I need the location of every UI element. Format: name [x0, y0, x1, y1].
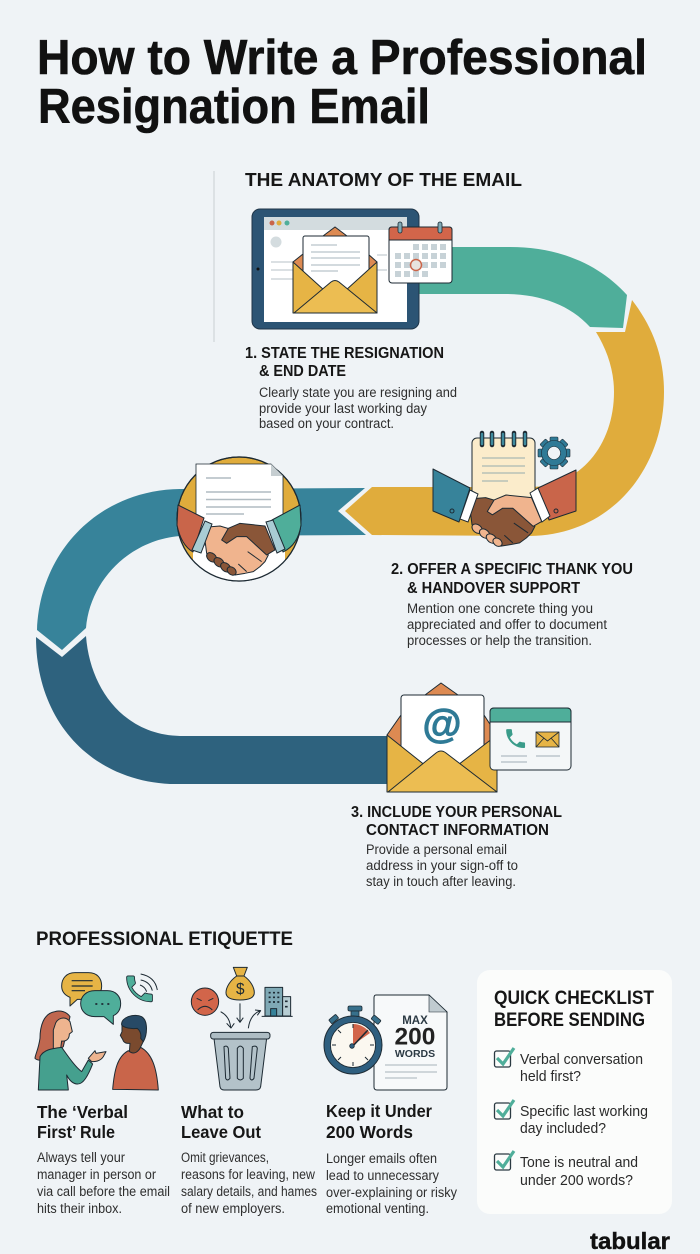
checklist item 1: held first? [520, 1068, 581, 1085]
trash bin [211, 1032, 270, 1090]
icon: stopwatch and 200 word document [324, 995, 447, 1090]
title: Resignation Email [38, 80, 430, 134]
etiquette 3 text: lead to unnecessary [326, 1168, 439, 1183]
checklist item 2 [494, 1100, 648, 1137]
etiquette 2 text: of new employers. [181, 1201, 285, 1216]
etiquette 1 text: Always tell your [37, 1150, 125, 1165]
arrow: teal band [415, 247, 627, 328]
heading: the anatomy of the email: THE ANATOMY OF THE EMAIL [245, 169, 522, 190]
checklist heading [494, 988, 654, 1031]
etiquette 2 text: What to [181, 1102, 244, 1122]
yellow speech bubble [62, 973, 102, 1006]
calendar [389, 222, 452, 283]
step 1 text: & END DATE [259, 363, 346, 380]
notepad [472, 433, 535, 513]
money bag: $ [236, 981, 245, 998]
contact card [490, 708, 571, 770]
envelope [387, 683, 497, 792]
stopwatch [324, 1006, 382, 1074]
etiquette 3 text: 200 Words [326, 1122, 413, 1142]
logo: tabular: tabular [590, 1228, 670, 1254]
icon: circle handshake with document [177, 457, 301, 581]
document: 200 [395, 1024, 435, 1050]
step 1 text: based on your contract. [259, 416, 394, 431]
step 3 text: address in your sign-off to [366, 858, 518, 873]
checklist item 2: Specific last working [520, 1103, 648, 1120]
checklist item 3 [494, 1151, 638, 1189]
phone [127, 974, 157, 1002]
etiquette 2 text: reasons for leaving, new [181, 1167, 315, 1182]
arrows [221, 1003, 261, 1028]
checklist heading: BEFORE SENDING [494, 1010, 645, 1031]
man [113, 1015, 158, 1090]
checklist item 2: day included? [520, 1120, 606, 1137]
etiquette 1 text: hits their inbox. [37, 1201, 122, 1216]
arrow: gold band [345, 300, 664, 536]
panel: quick checklist [477, 970, 672, 1214]
etiquette 2 text: Omit grievances, [181, 1150, 269, 1165]
etiquette 1 text: via call before the email [37, 1184, 170, 1199]
icon: trash bin with things to leave out [191, 967, 293, 1090]
step 3 text [351, 804, 562, 889]
etiquette 1 text [37, 1102, 170, 1216]
step 2 text: & HANDOVER SUPPORT [407, 580, 580, 597]
checklist item 3: Tone is neutral and [520, 1154, 638, 1171]
step 1 text: provide your last working day [259, 401, 427, 416]
step 1 text: Clearly state you are resigning and [259, 385, 457, 400]
hands [203, 523, 275, 577]
etiquette 1 text: The ‘Verbal [37, 1102, 128, 1122]
step 3 text: 3. INCLUDE YOUR PERSONAL [351, 804, 562, 821]
building [262, 987, 293, 1016]
arrow: teal-blue band [37, 488, 366, 650]
checklist item 3: under 200 words? [520, 1172, 633, 1189]
title [37, 31, 647, 134]
document [196, 464, 283, 545]
icon: two people talking [35, 973, 158, 1090]
etiquette 2 text: Leave Out [181, 1122, 261, 1142]
teal speech bubble [81, 991, 121, 1024]
sad face [191, 988, 219, 1015]
woman [35, 1011, 106, 1090]
checklist heading: QUICK CHECKLIST [494, 988, 654, 1009]
etiquette 3 text: Keep it Under [326, 1101, 432, 1121]
icon: envelope with at sign and contact card [387, 683, 571, 792]
etiquette 3 text: over-explaining or risky [326, 1185, 457, 1200]
icon: handshake with notepad and gear [433, 433, 576, 548]
etiquette 1 text: First’ Rule [37, 1122, 115, 1142]
etiquette 2 text [181, 1102, 317, 1216]
step 2 text [391, 561, 633, 648]
step 1 text [245, 345, 457, 431]
step 3 text: Provide a personal email [366, 842, 507, 857]
step 2 text: processes or help the transition. [407, 633, 592, 648]
document: WORDS [395, 1048, 435, 1060]
checklist item 1: Verbal conversation [520, 1051, 643, 1068]
icon: tablet with envelope and calendar [252, 209, 452, 329]
step 2 text: Mention one concrete thing you [407, 601, 593, 616]
title: How to Write a Professional [37, 31, 647, 85]
step 3 text: CONTACT INFORMATION [366, 822, 549, 839]
sleeves [433, 469, 470, 522]
arrow: dark blue band [36, 636, 395, 784]
heading: professional etiquette: PROFESSIONAL ETIQUETTE [36, 928, 293, 950]
document: MAX [402, 1015, 428, 1027]
step 3 text: stay in touch after leaving. [366, 874, 516, 889]
etiquette 1 text: manager in person or [37, 1167, 156, 1182]
etiquette 2 text: salary details, and hames [181, 1184, 317, 1199]
etiquette 3 text: emotional venting. [326, 1201, 429, 1216]
hands [469, 495, 542, 548]
envelope: @ [422, 702, 462, 746]
etiquette 3 text: Longer emails often [326, 1151, 437, 1166]
step 2 text: 2. OFFER A SPECIFIC THANK YOU [391, 561, 633, 578]
checklist item 1 [494, 1048, 643, 1085]
step 1 text: 1. STATE THE RESIGNATION [245, 345, 444, 362]
gear [538, 437, 570, 469]
step 2 text: appreciated and offer to document [407, 617, 607, 632]
etiquette 3 text [326, 1101, 457, 1216]
document [374, 995, 447, 1090]
envelope [293, 227, 377, 313]
